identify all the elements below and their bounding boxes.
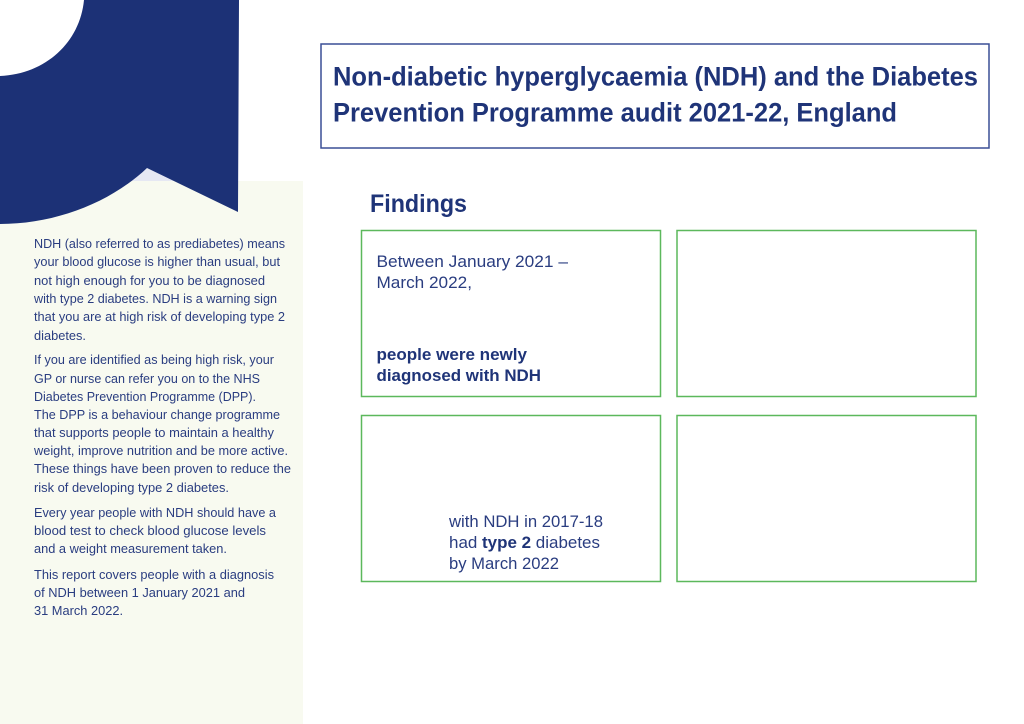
sidebar text: This report covers people with a diagnosis (34, 567, 274, 582)
lavender notch behind banner (124, 168, 174, 181)
card: top right empty (677, 230, 976, 396)
sidebar text: that you are at high risk of developing type 2 (34, 309, 285, 324)
sidebar text: blood test to check blood glucose levels (34, 523, 266, 538)
card: newly diagnosed: diagnosed with NDH (376, 366, 541, 385)
sidebar text: with type 2 diabetes. NDH is a warning sign (33, 291, 277, 306)
sidebar text: Every year people with NDH should have a (34, 505, 277, 520)
title: Non-diabetic hyperglycaemia (NDH) and the Diabetes (333, 62, 978, 92)
findings heading: Findings (370, 190, 467, 218)
sidebar text: GP or nurse can refer you on to the NHS (34, 371, 260, 386)
sidebar text: 31 March 2022. (34, 603, 123, 618)
sidebar text: that supports people to maintain a healthy (34, 425, 274, 440)
sidebar text: your blood glucose is higher than usual, but (34, 254, 280, 269)
card: newly diagnosed: Between January 2021 – (376, 252, 569, 271)
sidebar panel background (0, 181, 303, 724)
card: type 2 diabetes: had type 2 diabetes (449, 533, 600, 552)
sidebar text: and a weight measurement taken. (34, 541, 227, 556)
card: type 2 diabetes (362, 416, 660, 582)
card: newly diagnosed: people were newly (376, 345, 528, 364)
navy banner shape (0, 0, 239, 224)
sidebar text: of NDH between 1 January 2021 and (34, 585, 245, 600)
sidebar text: NDH (also referred to as prediabetes) means (34, 236, 285, 251)
sidebar text (33, 236, 291, 618)
card: type 2 diabetes: with NDH in 2017-18 (448, 512, 603, 531)
card: type 2 diabetes: by March 2022 (449, 554, 559, 573)
sidebar text: The DPP is a behaviour change programme (34, 407, 280, 422)
sidebar text: not high enough for you to be diagnosed (34, 273, 265, 288)
sidebar text: These things have been proven to reduce the (34, 461, 291, 476)
title (333, 62, 978, 128)
sidebar text: If you are identified as being high risk, your (34, 352, 275, 367)
card: newly diagnosed (362, 230, 660, 396)
card: newly diagnosed: March 2022, (376, 273, 472, 292)
title: Prevention Programme audit 2021-22, England (333, 98, 897, 128)
sidebar text: Diabetes Prevention Programme (DPP). (34, 389, 256, 404)
title box (321, 44, 989, 148)
card: bottom right empty (677, 416, 976, 582)
sidebar text: diabetes. (34, 328, 86, 343)
sidebar text: weight, improve nutrition and be more active. (33, 443, 288, 458)
sidebar text: risk of developing type 2 diabetes. (34, 480, 229, 495)
